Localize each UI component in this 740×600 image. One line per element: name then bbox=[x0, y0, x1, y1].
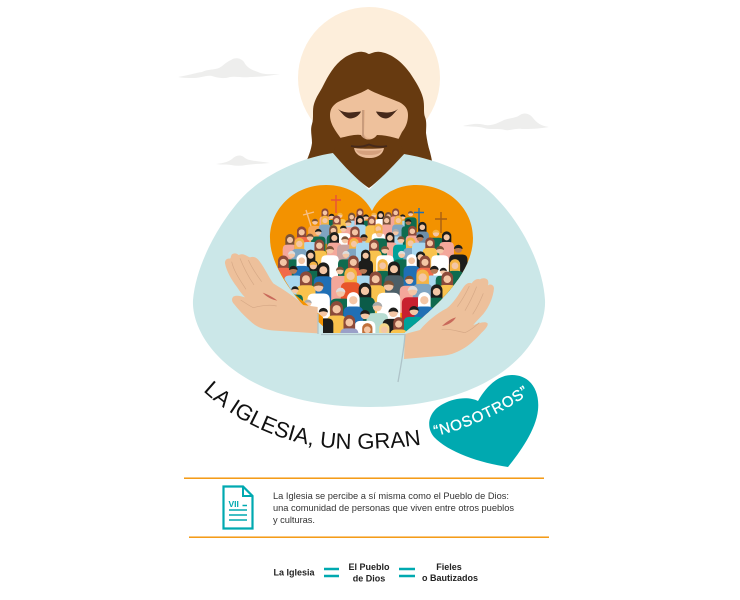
nose shadow bbox=[362, 110, 367, 141]
teal heart bbox=[429, 375, 538, 467]
equation: Fieles bbox=[436, 562, 462, 572]
left hand creases bbox=[232, 258, 277, 308]
body text: y culturas. bbox=[273, 515, 315, 525]
right hand bbox=[404, 278, 494, 359]
icon: document: VII bbox=[228, 499, 239, 509]
cloud: upper left bbox=[178, 58, 280, 78]
nose bbox=[362, 110, 377, 141]
body robe bbox=[193, 153, 545, 407]
equation: El Pueblo bbox=[348, 562, 390, 572]
halo bbox=[298, 7, 440, 149]
crowd of people bbox=[278, 208, 468, 333]
mouth shadow bbox=[356, 150, 382, 155]
equation: o Bautizados bbox=[422, 573, 478, 583]
lower lip bbox=[354, 148, 384, 158]
body text: La Iglesia se percibe a sí misma como el Pueblo de Dios: bbox=[273, 491, 509, 501]
equation: La Iglesia bbox=[273, 568, 315, 578]
right hand creases bbox=[442, 286, 483, 333]
hair bbox=[306, 52, 432, 175]
divider bottom bbox=[189, 536, 549, 538]
left hand bbox=[225, 253, 318, 333]
beard bbox=[333, 135, 404, 188]
title: curved text: LA IGLESIA, UN GRAN bbox=[204, 380, 420, 449]
eye right bbox=[376, 109, 398, 118]
body text: una comunidad de personas que viven entre otros pueblos bbox=[273, 503, 514, 513]
moustache bbox=[351, 144, 387, 147]
crosses bbox=[303, 195, 447, 233]
cloud: lower left bbox=[216, 155, 270, 166]
face bbox=[330, 89, 408, 160]
equation bbox=[273, 562, 478, 584]
sleeve outline bbox=[318, 314, 405, 382]
icon: document bbox=[224, 486, 252, 528]
eye left bbox=[338, 109, 361, 118]
cloud: right bbox=[463, 114, 549, 130]
body text bbox=[273, 491, 514, 525]
heart: orange bbox=[270, 185, 473, 333]
right hand wound bbox=[442, 317, 456, 326]
heart text: nosotros: “NOSOTROS” bbox=[433, 385, 524, 435]
left hand wound bbox=[263, 293, 277, 301]
divider top bbox=[184, 478, 544, 479]
equation: de Dios bbox=[353, 574, 385, 584]
